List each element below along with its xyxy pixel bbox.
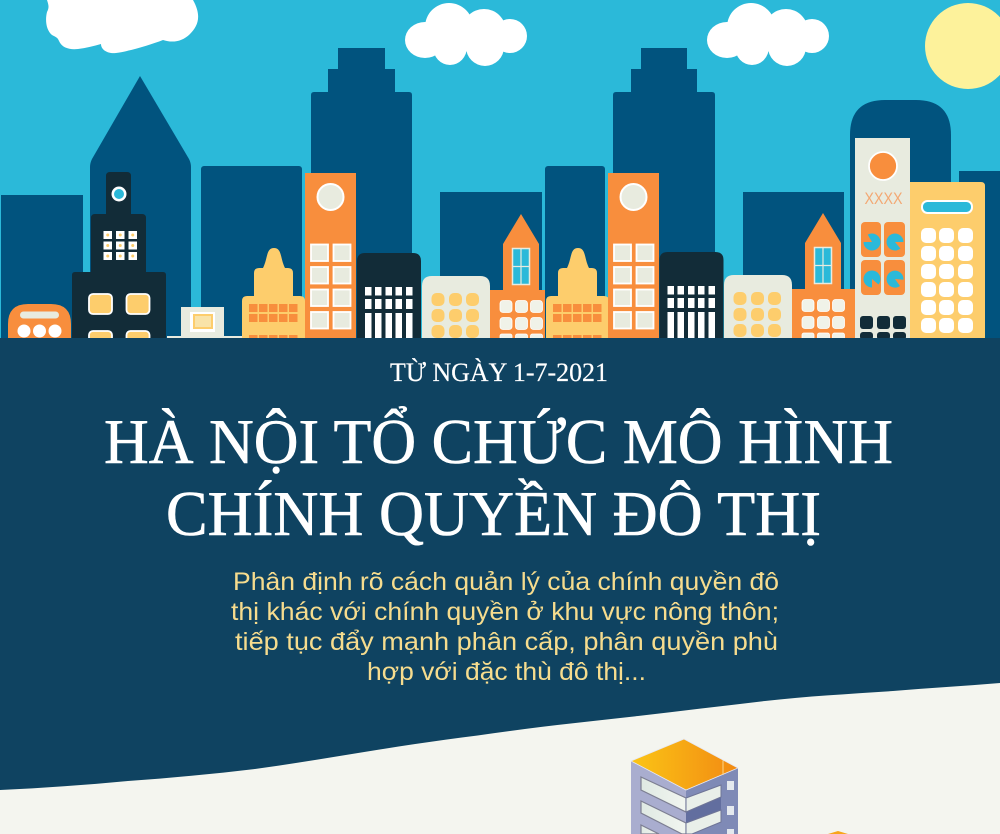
tall pale tower (855, 138, 910, 340)
background pointed tower (90, 76, 191, 340)
subtitle text block (231, 568, 779, 686)
background stepped tower 2 (613, 48, 715, 340)
cloud: top right (707, 3, 829, 66)
cloud: top left (46, 0, 198, 53)
yellow dome building 2 (546, 248, 609, 340)
subtitle text block: hợp với đặc thù đô thị... (367, 658, 646, 686)
dark clock tower (72, 172, 166, 351)
yellow calculator building (910, 182, 985, 340)
subtitle text block: tiếp tục đẩy mạnh phân cấp, phân quyền phù (235, 628, 778, 656)
background building 6 (959, 171, 1000, 340)
orange tower 2 (608, 173, 659, 340)
orange house 1 (490, 214, 545, 340)
icon: second building roof tip (828, 831, 848, 834)
sky background (0, 0, 1000, 340)
dark grid building 2 (660, 252, 724, 340)
background building 4 (545, 166, 605, 340)
background building 2 (201, 166, 302, 340)
background stepped tower 1 (311, 48, 412, 340)
dark grid building 1 (357, 253, 421, 340)
orange house 2 (792, 213, 855, 340)
main title: HÀ NỘI TỔ CHỨC MÔ HÌNH (104, 406, 893, 477)
pale dotted building 2 (724, 275, 792, 340)
icon: isometric office building (631, 739, 738, 834)
orange tower 1 (305, 173, 356, 340)
background rounded tower (850, 100, 951, 340)
pale dotted building 1 (422, 276, 490, 340)
subtitle text block: thị khác với chính quyền ở khu vực nông thôn; (231, 598, 779, 626)
yellow dome building 1 (242, 248, 305, 340)
sun (925, 3, 1000, 89)
background skyline (1, 48, 1000, 340)
panel: dark title band with curved bottom (0, 338, 1000, 790)
main title (104, 406, 893, 549)
small pale kiosk (167, 307, 243, 339)
subtitle text block: Phân định rõ cách quản lý của chính quyền đô (233, 568, 779, 596)
date line: TỪ NGÀY 1-7-2021 (390, 358, 608, 387)
main title: CHÍNH QUYỀN ĐÔ THỊ (166, 478, 821, 549)
clouds (46, 0, 829, 66)
cloud: top centre (405, 3, 527, 66)
background building 1 (1, 195, 83, 340)
tower sign: XXXX (864, 189, 902, 208)
background building 3 (440, 192, 542, 340)
background building 5 (743, 192, 844, 340)
orange bus-shaped building (8, 304, 71, 340)
